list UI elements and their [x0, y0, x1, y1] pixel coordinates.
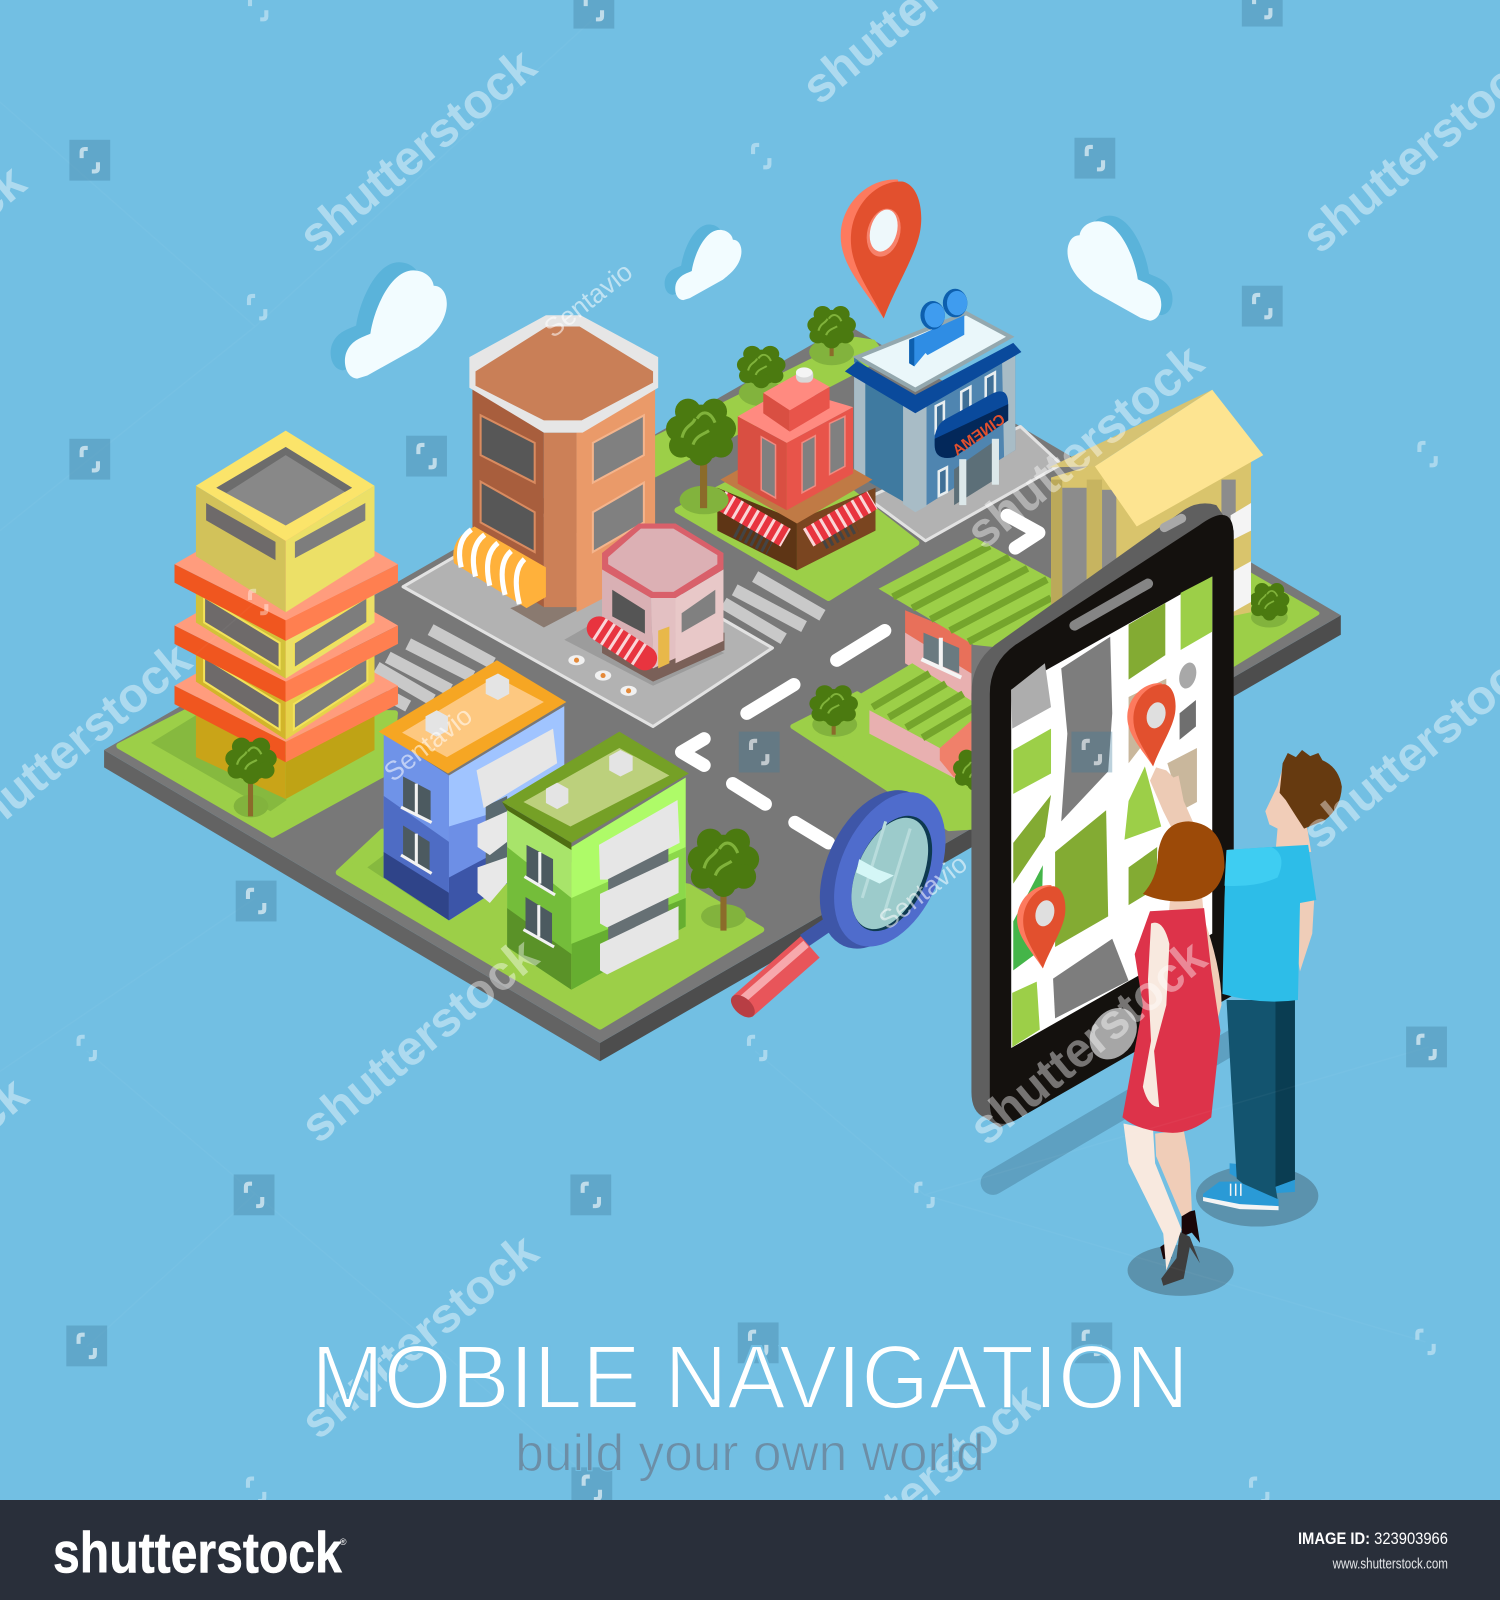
tree right corner — [1249, 583, 1289, 628]
phone camera — [1164, 518, 1182, 528]
red shop windows — [737, 530, 770, 547]
green striped roof lower — [855, 663, 985, 748]
watermark: shutterstock repeated: shutterstock — [956, 334, 1214, 560]
slab 2 — [174, 561, 398, 702]
watermark: shutterstock repeated: shutterstock — [794, 1372, 1052, 1598]
phone front — [990, 515, 1234, 1124]
map pin upper — [1127, 683, 1176, 766]
woman back leg — [1155, 1130, 1192, 1216]
tree back 2 — [737, 346, 786, 406]
phone shadow — [993, 1041, 1235, 1183]
red tower cap — [796, 367, 813, 383]
green building — [502, 732, 689, 990]
cafe tables — [568, 655, 637, 696]
cinema roof — [857, 313, 1010, 390]
gold building — [1049, 390, 1263, 653]
phone speaker — [1074, 584, 1148, 626]
cinema camera icon — [909, 289, 967, 366]
man — [1150, 750, 1342, 1210]
location pin large — [841, 179, 921, 318]
map pin lower — [1017, 885, 1065, 968]
blue building balconies — [477, 729, 557, 903]
cloud right — [1068, 216, 1173, 321]
red tower top block — [763, 393, 790, 432]
green striped roof upper — [879, 538, 1051, 653]
green building balconies — [599, 800, 680, 974]
sidewalk plot: cinema — [867, 427, 1061, 541]
man hair — [1280, 750, 1342, 829]
footer logo: shutterstock — [53, 1521, 342, 1585]
blue roof vents — [426, 673, 509, 737]
tree behind phone — [953, 750, 996, 791]
top block — [196, 486, 374, 612]
cinema blue band — [845, 343, 1021, 413]
man t-shirt — [1222, 845, 1316, 1002]
watermark: shutterstock repeated: shutterstock — [291, 928, 549, 1153]
orange tower — [453, 315, 658, 628]
phone screen map — [1011, 577, 1212, 1048]
watermark: Sentavio author credit: Sentavio — [873, 848, 973, 935]
watermark: shutterstock repeated: shutterstock — [291, 1223, 549, 1449]
man shadow — [1196, 1165, 1318, 1227]
watermark: shutterstock repeated: shutterstock — [959, 930, 1217, 1155]
title: MOBILE NAVIGATION — [311, 1328, 1189, 1428]
cinema building — [845, 289, 1021, 512]
smartphone — [971, 503, 1234, 1128]
green building roof — [502, 732, 689, 843]
woman front leg — [1123, 1123, 1182, 1270]
woman neck — [1168, 896, 1204, 918]
man neck and face — [1265, 767, 1311, 852]
woman — [1122, 821, 1224, 1286]
phone side — [971, 503, 1234, 1128]
magnifier — [727, 772, 968, 1022]
woman left arm — [1143, 923, 1169, 1107]
man trousers — [1227, 1000, 1295, 1199]
slab 3 — [174, 622, 398, 762]
tree yellow plot — [225, 738, 277, 817]
woman hair — [1143, 821, 1224, 901]
footer image id: IMAGE ID: 323903966 — [1298, 1530, 1448, 1548]
green plot: red building — [678, 449, 916, 598]
pink shop roof — [602, 523, 723, 598]
yellow roof — [196, 431, 374, 541]
blue building roof — [379, 660, 566, 773]
woman shoes — [1160, 1210, 1200, 1286]
gold white bands — [1231, 503, 1251, 612]
red building — [717, 367, 876, 570]
green roof vents — [546, 750, 633, 809]
orange tower roof — [469, 315, 658, 433]
green building windows — [523, 845, 555, 947]
cloud left — [331, 262, 447, 379]
woman shadow — [1128, 1245, 1234, 1296]
red awning left — [720, 500, 786, 538]
slab 1 — [174, 500, 398, 641]
orange striped awning — [453, 527, 546, 608]
crosswalk right — [723, 577, 822, 639]
blue building windows — [401, 777, 432, 873]
blue building — [379, 660, 566, 920]
green plot: blue and green buildings — [339, 832, 761, 1027]
block 3 — [196, 638, 374, 740]
footer bar — [0, 1500, 1500, 1600]
pink shop — [599, 523, 724, 682]
woman right arm — [1199, 913, 1221, 1043]
striped house — [855, 538, 1051, 782]
phone home button — [1080, 999, 1147, 1069]
green plot: yellow building — [119, 710, 395, 835]
green strip behind buildings — [653, 337, 888, 478]
man raised arm — [1150, 767, 1204, 852]
yellow building — [174, 431, 398, 799]
green plot: right corner — [1233, 571, 1317, 665]
watermark: Sentavio author credit: Sentavio — [378, 700, 478, 787]
pink striped awning — [599, 629, 645, 658]
cinema entrance — [954, 439, 999, 505]
cinema windows — [936, 372, 995, 496]
watermark: Sentavio author credit: Sentavio — [538, 256, 638, 344]
magnifier handle — [727, 923, 830, 1022]
green plot: striped house — [793, 694, 980, 829]
crosswalk left — [377, 630, 493, 706]
red tower body — [738, 416, 787, 510]
footer registered mark: ® — [340, 1537, 347, 1547]
woman dress — [1122, 908, 1220, 1133]
watermark: shutterstock repeated: shutterstock — [289, 38, 547, 264]
block 2 — [196, 577, 374, 679]
tree back 1 — [807, 306, 856, 365]
sidewalk plot: orange tower — [403, 510, 772, 727]
red awning right — [808, 500, 872, 538]
footer url: www.shutterstock.com — [1332, 1556, 1448, 1572]
road markings — [682, 515, 1039, 843]
tree green plot — [688, 829, 759, 931]
orange tower windows — [481, 415, 644, 552]
cinema canopy: CINEMA — [949, 411, 1009, 459]
man shoes — [1203, 1163, 1295, 1210]
cinema canopy — [935, 391, 1009, 459]
man right arm — [1296, 898, 1314, 971]
yellow base — [196, 704, 286, 799]
pink shop menu board — [658, 627, 669, 668]
city platform — [104, 324, 1341, 1061]
subtitle: build your own world — [515, 1424, 985, 1482]
cloud middle — [665, 225, 741, 300]
tree middle — [666, 399, 736, 514]
watermark: Sentavio author credit — [378, 256, 973, 935]
tree by striped house — [809, 685, 858, 737]
